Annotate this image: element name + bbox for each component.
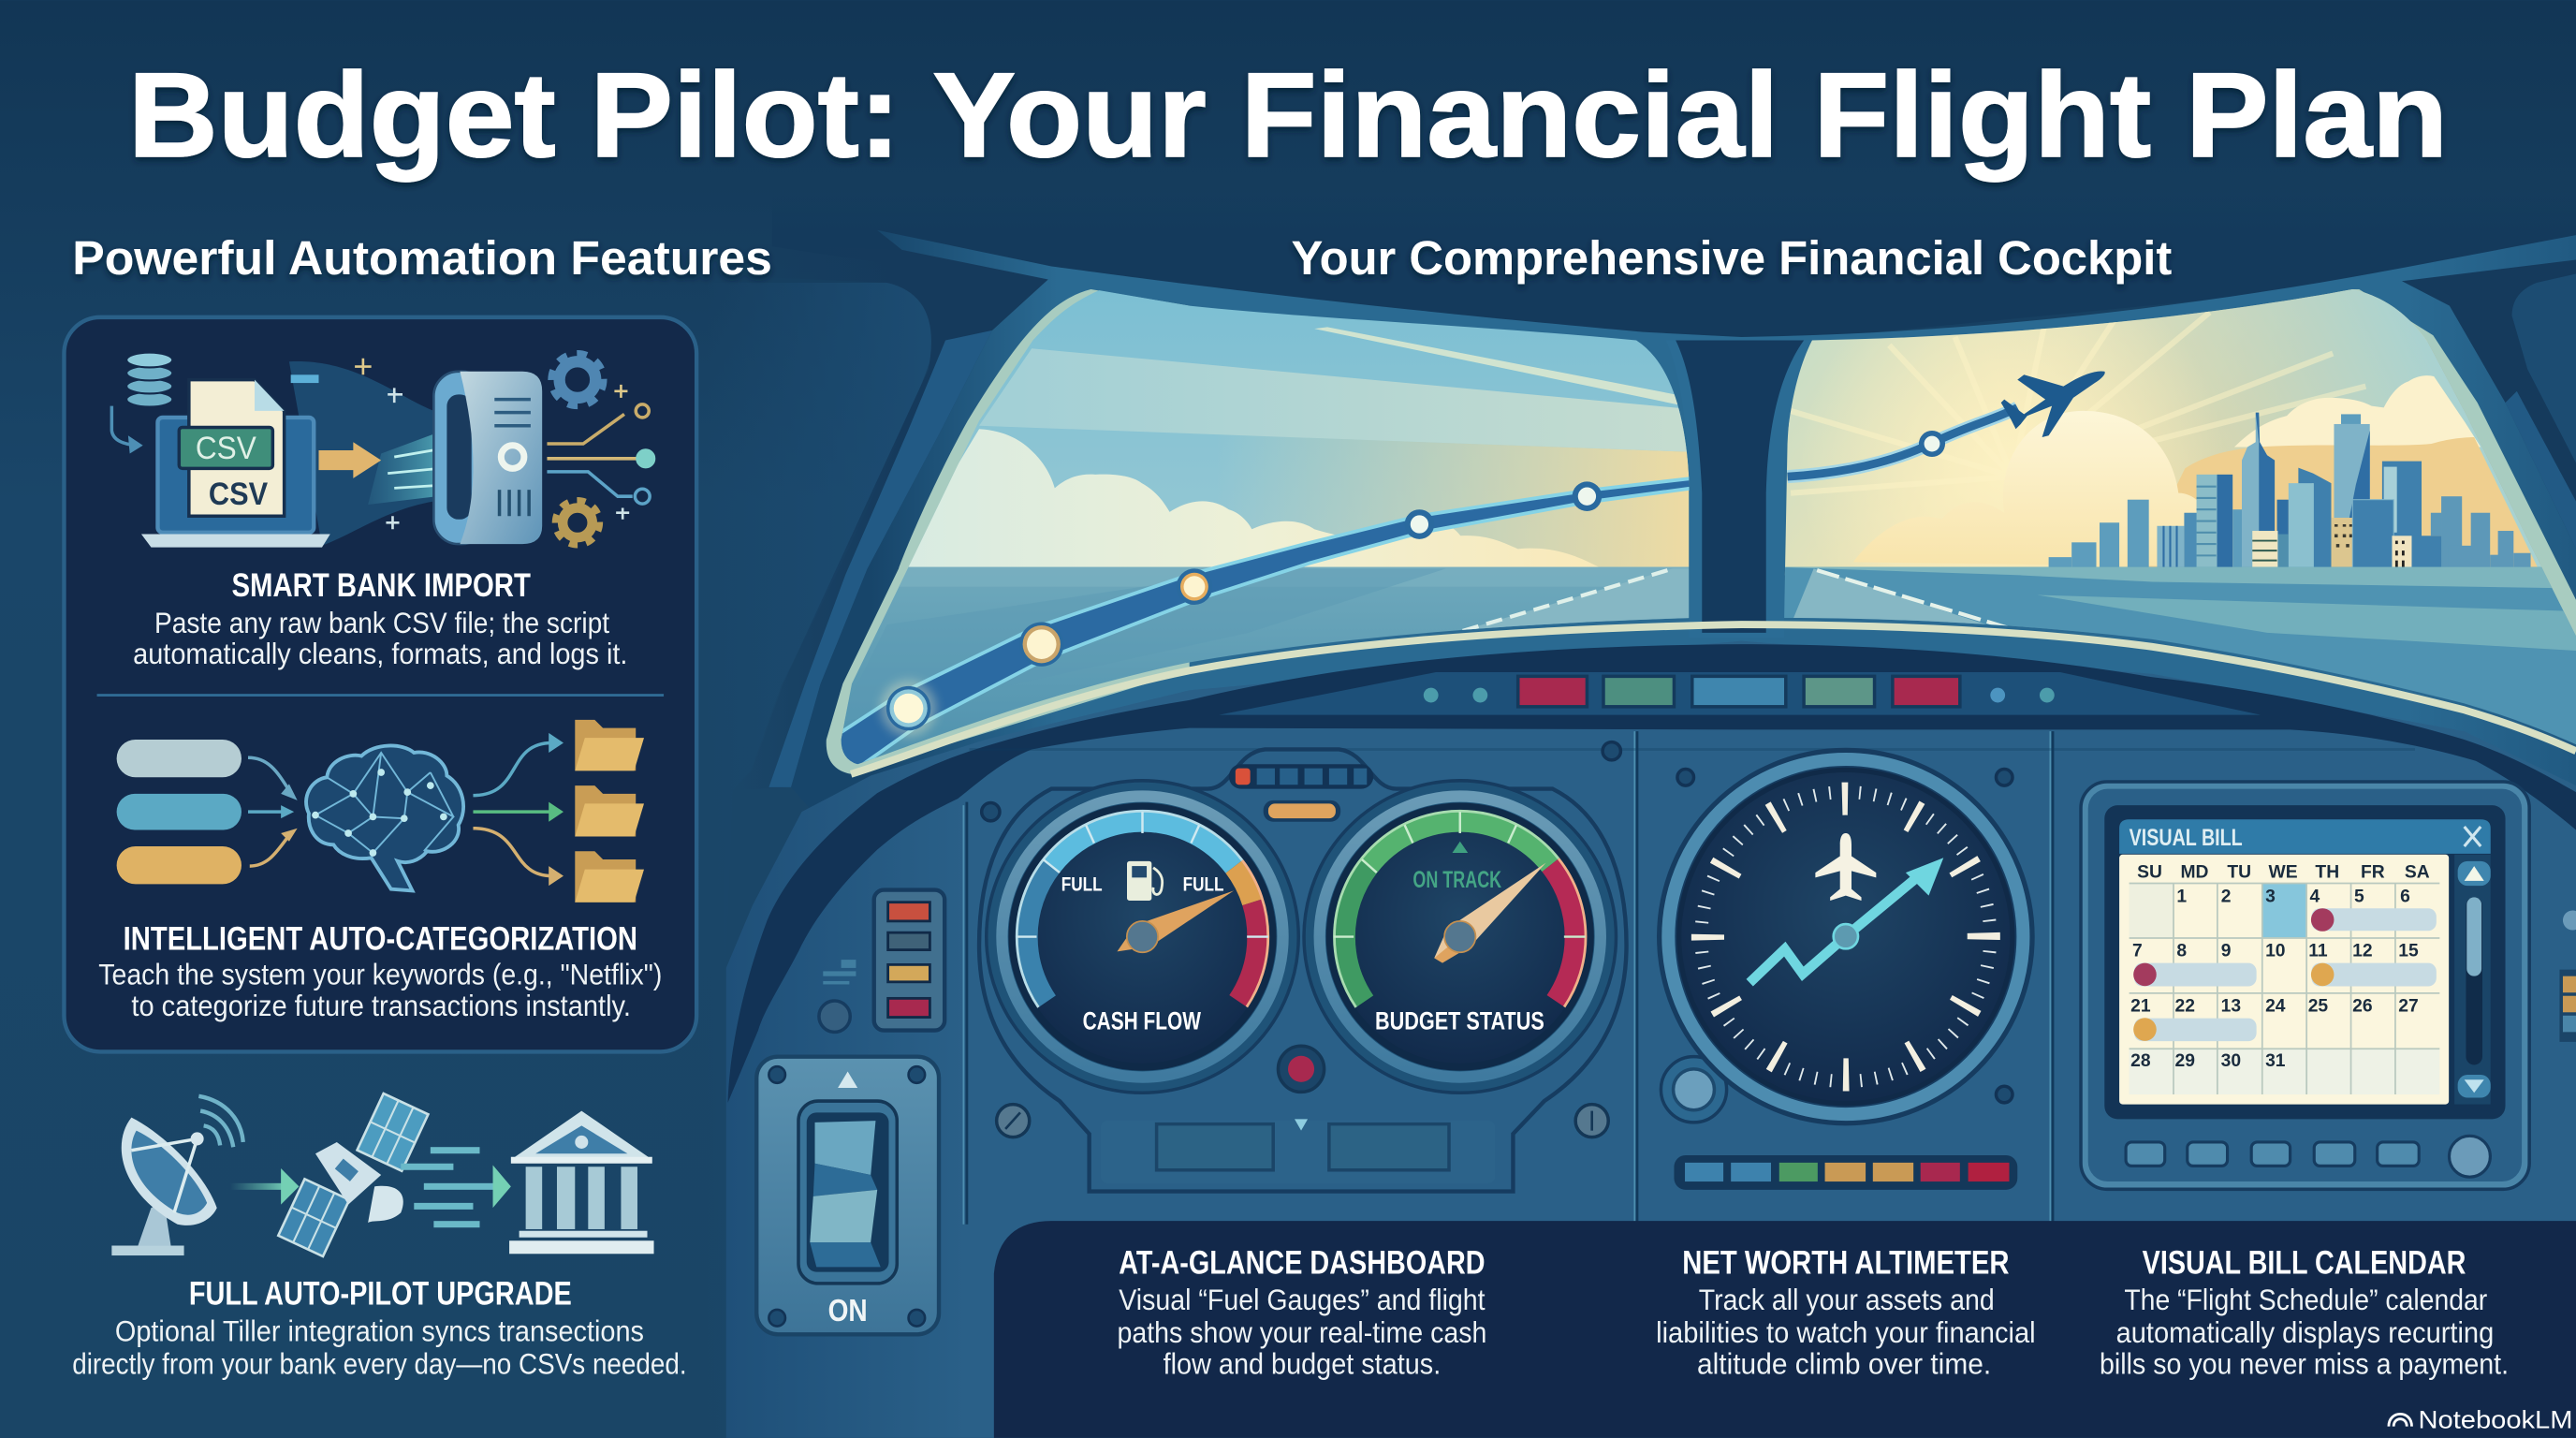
heading: powerful automation features: Powerful Automation Features xyxy=(72,231,772,285)
server xyxy=(433,372,487,544)
calendar grid: 1 xyxy=(2176,888,2187,907)
feature: full auto-pilot upgrade: Optional Tiller integration syncs transections xyxy=(115,1313,644,1347)
icon: on switch xyxy=(756,1057,939,1334)
gauge cluster backing xyxy=(979,742,1627,1192)
feature: intelligent auto-categorization: Teach the system your keywords (e.g., "Netflix") xyxy=(98,957,662,990)
caption: net worth altimeter: NET WORTH ALTIMETER xyxy=(1682,1244,2009,1281)
calendar grid: 22 xyxy=(2175,996,2195,1016)
colour status strip xyxy=(1674,1155,2017,1190)
side light panel xyxy=(819,890,944,1032)
icon: satellite sync to bank xyxy=(111,1093,654,1256)
input arrows xyxy=(248,757,292,866)
folders xyxy=(575,720,636,902)
calendar buttons xyxy=(2126,1136,2490,1177)
icon: airplane xyxy=(2001,371,2105,437)
altimeter xyxy=(1657,748,2035,1125)
icon: csv import to server: CSV xyxy=(209,477,268,512)
panel dividers xyxy=(963,731,2415,1225)
calendar grid: WE xyxy=(2269,862,2298,882)
calendar grid xyxy=(2119,855,2449,1105)
warning light panel xyxy=(1219,672,2261,715)
sun cloud xyxy=(1853,411,2231,567)
caption: at-a-glance dashboard: AT-A-GLANCE DASHBOARD xyxy=(1119,1244,1486,1281)
satellite xyxy=(278,1093,428,1256)
caption: net worth altimeter: liabilities to watch your financial xyxy=(1656,1315,2036,1349)
glare shield dark band xyxy=(728,644,2576,1103)
calendar grid: 2 xyxy=(2221,888,2232,907)
right window pillar xyxy=(2402,246,2576,549)
panel: automation features xyxy=(64,317,696,1051)
icon: csv import to server: CSV xyxy=(196,431,256,466)
gauge label: full right: FULL xyxy=(1183,873,1224,895)
icon: csv import to server xyxy=(111,353,654,548)
gold arrow xyxy=(318,442,381,478)
waypoint 1 xyxy=(881,681,936,736)
caption: visual bill calendar xyxy=(2100,1244,2509,1380)
icon: fuel pump xyxy=(1127,861,1163,901)
window frame xyxy=(791,230,2576,822)
cockpit left wall panel xyxy=(707,283,936,1438)
caption: at-a-glance dashboard xyxy=(1117,1244,1486,1380)
calendar grid: 5 xyxy=(2354,888,2364,907)
calendar grid: 24 xyxy=(2265,996,2286,1016)
red button xyxy=(1278,1046,1325,1092)
gears xyxy=(551,353,604,406)
left windshield xyxy=(841,290,1689,764)
ground left xyxy=(841,567,1689,764)
input pills xyxy=(117,740,242,884)
feature: full auto-pilot upgrade xyxy=(72,1276,687,1380)
flight path with waypoints xyxy=(810,407,2017,785)
lower cluster controls xyxy=(997,1105,1608,1183)
gauge label: full: FULL xyxy=(1061,873,1103,895)
data arrow xyxy=(230,1168,299,1205)
feature: smart bank import xyxy=(133,567,627,670)
feature: smart bank import: automatically cleans, formats, and logs it. xyxy=(133,637,627,670)
calendar title bar: VISUAL BILL xyxy=(2130,826,2243,851)
icon: brain categorization xyxy=(117,720,644,902)
calendar grid: 28 xyxy=(2130,1051,2151,1071)
database xyxy=(126,353,172,407)
feature: intelligent auto-categorization: INTELLIGENT AUTO-CATEGORIZATION xyxy=(124,921,637,958)
heading: comprehensive financial cockpit: Your Comprehensive Financial Cockpit xyxy=(1292,231,2172,285)
calendar grid: 7 xyxy=(2132,942,2143,961)
caption: net worth altimeter: altitude climb over time. xyxy=(1697,1346,1991,1380)
window glass edge strips xyxy=(827,289,2576,774)
sun rays xyxy=(1791,313,2365,493)
altimeter knob xyxy=(1674,1069,1714,1110)
gauge: cash flow xyxy=(987,781,1298,1093)
notebooklm logo: NotebookLM xyxy=(2419,1404,2572,1433)
calendar grid: 12 xyxy=(2352,942,2373,961)
caption: visual bill calendar: automatically displays recurting xyxy=(2116,1315,2494,1349)
cream clouds behind city xyxy=(2234,375,2481,448)
feature: intelligent auto-categorization: to categorize future transactions instantly. xyxy=(131,989,631,1022)
feature: full auto-pilot upgrade: FULL AUTO-PILOT UPGRADE xyxy=(189,1276,572,1313)
gauge label: on track: ON TRACK xyxy=(1412,868,1501,893)
calendar grid: 30 xyxy=(2221,1051,2241,1071)
feature: intelligent auto-categorization xyxy=(98,921,662,1022)
calendar grid: FR xyxy=(2361,862,2385,882)
calendar grid: 6 xyxy=(2400,888,2410,907)
cockpit ceiling xyxy=(772,181,2576,345)
caption: at-a-glance dashboard: Visual “Fuel Gauges” and flight xyxy=(1119,1283,1486,1316)
feature: full auto-pilot upgrade: directly from your bank every day—no CSVs needed. xyxy=(72,1346,687,1380)
gauge label: budget status: BUDGET STATUS xyxy=(1375,1006,1544,1035)
calendar grid: 21 xyxy=(2130,996,2151,1016)
waypoint 6 xyxy=(1919,431,1945,457)
caption: at-a-glance dashboard: flow and budget status. xyxy=(1164,1346,1441,1380)
caption: at-a-glance dashboard: paths show your real-time cash xyxy=(1117,1315,1486,1349)
panel: dashboard captions background xyxy=(994,1221,2576,1438)
indicator strip xyxy=(1229,764,1373,822)
needle xyxy=(1434,863,1546,963)
gauge label: cash flow: CASH FLOW xyxy=(1083,1006,1201,1035)
calendar grid: 26 xyxy=(2352,996,2373,1016)
caption: visual bill calendar: The “Flight Schedule” calendar xyxy=(2124,1283,2487,1316)
calendar scrollbar xyxy=(2454,855,2491,1105)
calendar grid: MD xyxy=(2180,862,2209,882)
motion lines xyxy=(401,1147,511,1227)
calendar grid: TH xyxy=(2315,862,2339,882)
dashboard shell xyxy=(726,641,2576,1438)
calendar grid: 15 xyxy=(2398,942,2419,961)
calendar title bar xyxy=(2119,819,2491,854)
calendar grid: 31 xyxy=(2265,1051,2286,1071)
satellite dish xyxy=(111,1096,243,1255)
gauge: budget status xyxy=(1304,781,1616,1093)
calendar grid: 11 xyxy=(2308,942,2328,961)
calendar grid: SA xyxy=(2405,862,2430,882)
ground right xyxy=(1784,567,2576,744)
centre window post xyxy=(1666,340,1812,638)
feature: smart bank import: Paste any raw bank CSV file; the script xyxy=(154,606,609,639)
waypoint 4 xyxy=(1405,509,1434,539)
calendar grid: TU xyxy=(2227,862,2251,882)
calendar grid: 13 xyxy=(2221,996,2241,1016)
switch label: ON xyxy=(828,1294,868,1328)
csv document xyxy=(189,380,285,516)
calendar grid: 3 xyxy=(2265,888,2276,907)
title: Budget Pilot: Your Financial Flight Plan xyxy=(128,49,2448,183)
calendar grid: 25 xyxy=(2308,996,2328,1016)
calendar grid: 27 xyxy=(2398,996,2419,1016)
right windshield xyxy=(1784,289,2576,744)
calendar grid: 9 xyxy=(2221,942,2232,961)
calendar grid: 8 xyxy=(2176,942,2187,961)
caption: net worth altimeter: Track all your assets and xyxy=(1699,1283,1995,1316)
caption: visual bill calendar: VISUAL BILL CALENDAR xyxy=(2143,1244,2466,1281)
brain xyxy=(306,745,463,890)
needle xyxy=(1117,890,1234,952)
left window pillar shadow xyxy=(733,243,1048,790)
output arrows xyxy=(473,742,552,876)
calendar grid: SU xyxy=(2137,862,2162,882)
calendar device xyxy=(2081,782,2529,1189)
caption: net worth altimeter xyxy=(1656,1244,2036,1380)
sparkles xyxy=(355,359,627,398)
data stream xyxy=(289,361,433,546)
right edge controls xyxy=(2559,910,2576,1042)
icon: plane on dial xyxy=(1815,833,1876,901)
waypoint 2 xyxy=(1019,622,1063,667)
waypoint 3 xyxy=(1177,568,1212,605)
laptop xyxy=(157,418,314,533)
clouds left xyxy=(896,429,1602,568)
caption: visual bill calendar: bills so you never miss a payment. xyxy=(2100,1346,2509,1380)
growth arrow xyxy=(1749,858,1943,983)
glare shield cream edge xyxy=(851,624,2576,774)
calendar grid: 10 xyxy=(2265,942,2286,961)
circuit lines xyxy=(547,404,654,504)
calendar grid: 4 xyxy=(2310,888,2320,907)
calendar grid: 29 xyxy=(2175,1051,2195,1071)
waypoint 5 xyxy=(1573,481,1602,511)
city skyline xyxy=(2049,413,2531,570)
tan horizon haze xyxy=(2136,437,2539,568)
feature: smart bank import: SMART BANK IMPORT xyxy=(231,567,531,604)
bank building xyxy=(509,1111,654,1254)
